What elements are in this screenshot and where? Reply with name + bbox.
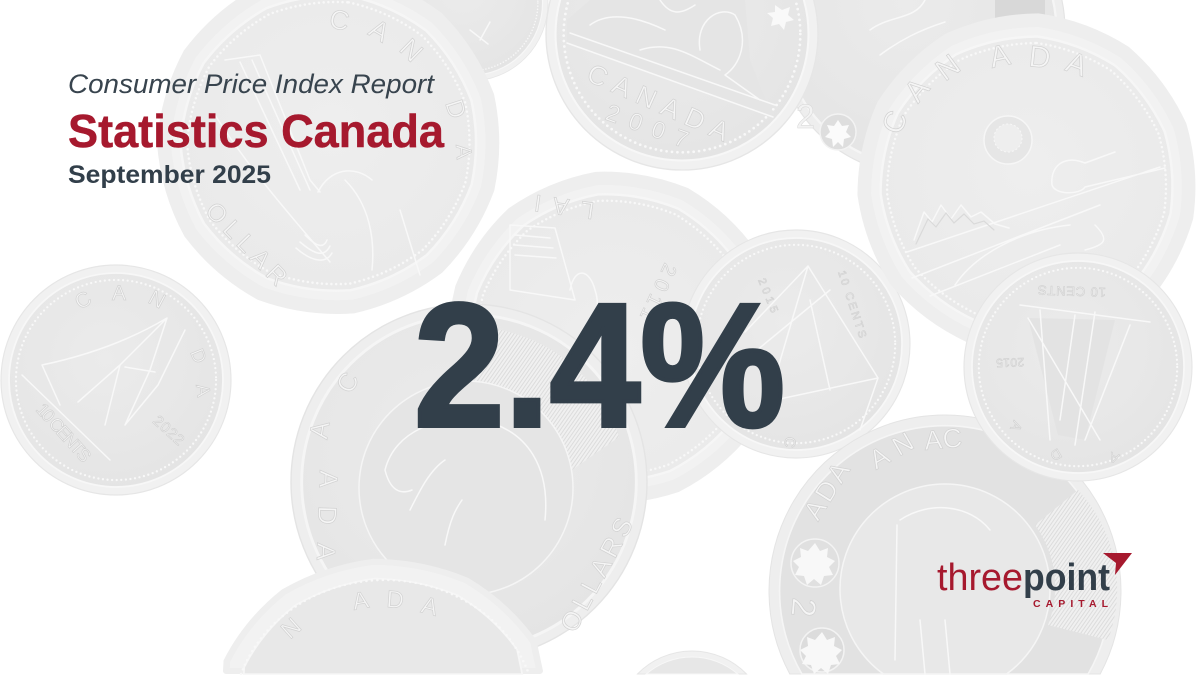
- coin: toonie, bottom right: 2: [783, 596, 823, 618]
- coin: loonie, bottom: A: [350, 587, 371, 616]
- coin: loonie, top left: D: [439, 96, 472, 122]
- date: September 2025: [68, 161, 271, 189]
- coin: loonie, top left: [144, 0, 514, 328]
- logo arrow mark: [1103, 553, 1132, 575]
- coin: loonie, right: A: [987, 38, 1013, 75]
- coin: loonie, middle (reversed lettering): 2011: [635, 260, 680, 324]
- coin: toonie, centre: C: [330, 367, 365, 398]
- coin: dime, middle: C: [780, 435, 799, 449]
- coin: dime, left: 10 CENTS: [32, 399, 95, 466]
- coin: nickel 2007: CANADA: [583, 58, 734, 147]
- coin: toonie, bottom right: AC: [923, 423, 963, 456]
- logo wordmark: three: [937, 557, 1023, 599]
- coin: partly hidden coin, top: [392, 0, 548, 81]
- coin: loonie, top left: N: [394, 33, 429, 68]
- coin: dime, right: A: [1106, 449, 1121, 467]
- coin: loonie, bottom: D: [386, 586, 405, 614]
- coin: loonie, right: [854, 9, 1200, 356]
- coin: dime, middle: [682, 230, 910, 458]
- coin: dime, left: D: [185, 346, 210, 367]
- coin: dime, left: [1, 265, 231, 495]
- coin: loonie, top left: OLLAR: [200, 197, 293, 292]
- coin: dime, left: A: [191, 383, 214, 399]
- coin: loonie, middle (reversed lettering): [429, 154, 798, 524]
- logo wordmark: [937, 557, 1110, 599]
- coin: dime, right: D: [1048, 445, 1064, 464]
- coin: loonie, top left: A: [364, 13, 395, 48]
- heading block: [68, 69, 444, 189]
- coin: loonie, right: D: [1027, 40, 1052, 75]
- headline figure: 2.4%: [414, 268, 785, 464]
- coin: toonie, bottom right: ADA: [798, 457, 856, 525]
- coin: dime, middle: 10 CENTS: [835, 269, 868, 340]
- coin: toonie, centre: A: [303, 419, 335, 441]
- coin: loonie, right: A: [898, 72, 936, 108]
- coin: toonie, bottom right: [769, 415, 1121, 674]
- coin: toonie behind, top right: [775, 0, 1065, 175]
- coin: toonie, centre: ADA: [311, 470, 344, 561]
- title: Statistics Canada: [68, 105, 444, 157]
- coin: loonie, right: A: [1062, 46, 1092, 83]
- logo subline: CAPITAL: [1033, 598, 1109, 610]
- coin: toonie behind, top right: 2: [796, 98, 815, 136]
- coin: dime, left: A: [112, 282, 126, 305]
- coin: nickel 2007: [546, 0, 818, 170]
- coin: loonie, top left: A: [451, 144, 477, 160]
- coin: dime, middle: 2015: [755, 277, 780, 315]
- coin: dime, right: [964, 253, 1192, 481]
- coin: dime, left: 2022: [149, 412, 187, 449]
- coin: loonie, bottom: N: [276, 613, 307, 644]
- coin: dime, right: A: [1007, 419, 1026, 435]
- coin: loonie, top left: C: [327, 4, 352, 37]
- coin: dime, right: 2015: [996, 355, 1024, 370]
- coin: loonie, middle (reversed lettering): LAI: [533, 189, 596, 224]
- coin: loonie, bottom: A: [419, 592, 441, 622]
- coin: toonie, centre: OLLARS: [554, 512, 639, 637]
- coin: nickel 2007: 2007: [602, 99, 692, 154]
- subtitle: Consumer Price Index Report: [68, 69, 436, 99]
- coin: toonie, bottom right: AN: [864, 426, 919, 475]
- coin: dime, left: C: [71, 287, 96, 314]
- coin: loonie, right: C: [876, 106, 915, 139]
- coin: loonie, bottom: [226, 562, 540, 674]
- coin: toonie, centre: [291, 304, 647, 660]
- logo wordmark: point: [1023, 557, 1110, 599]
- coin: dime, right: 10 CENTS: [1037, 283, 1106, 300]
- coin: dime, left: N: [145, 286, 169, 314]
- coin: loonie, right: N: [930, 48, 967, 88]
- logo: threepoint capital: [937, 553, 1132, 610]
- coin: small coin, bottom centre: [638, 651, 746, 674]
